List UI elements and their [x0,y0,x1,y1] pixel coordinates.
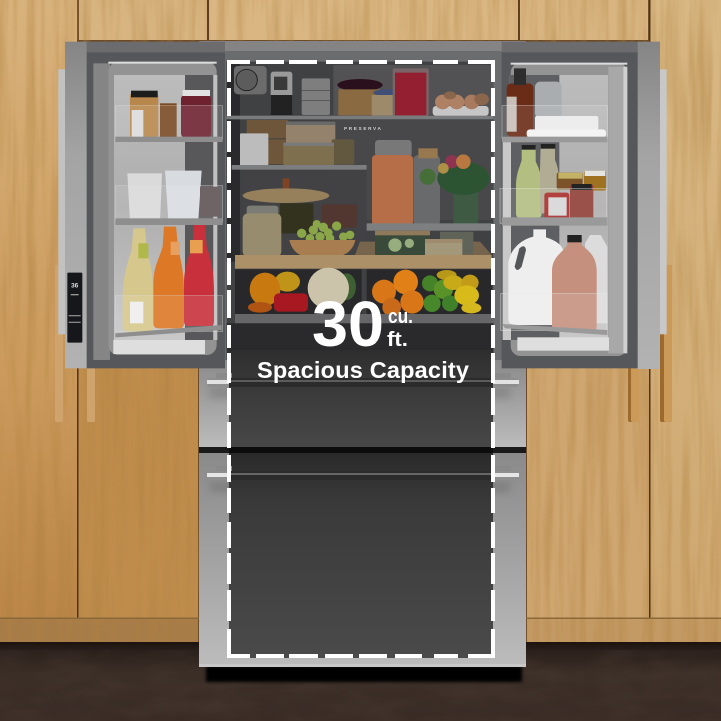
number 30: 30 [312,288,384,360]
subtitle: Spacious Capacity [257,357,469,383]
ice maker [234,66,267,94]
dressing and jars [516,144,606,221]
capacity callout [257,288,469,383]
left door [58,42,225,368]
top shelf items [271,68,489,116]
lower freezer drawers [199,350,526,667]
floor [0,642,721,721]
pitcher, carafe, flowers [372,140,489,226]
wood shelf [235,255,492,269]
milk jug and carafe [508,229,607,332]
right door [500,42,667,369]
door handle [660,69,667,334]
door bins [500,106,607,331]
top bin items [507,68,606,138]
dashed capacity outline [227,60,495,658]
wooden cabinet handles [55,265,672,422]
control panel [67,273,82,343]
refrigerator top and cavity [199,41,526,366]
door bins [115,106,223,332]
interior shelves and food [227,62,493,380]
jars [130,90,211,139]
unit cu. ft.: cu. [388,306,413,328]
crisper drawers with produce [235,268,492,317]
middle shelf items [240,120,383,166]
lower shelf items [243,178,473,257]
brand text: PRESERVA [344,126,383,131]
drawer handles [207,373,519,480]
door handle [58,69,65,334]
capacity callout: ft. [387,329,408,351]
yogurt tubs [127,171,220,222]
wood shelf back [355,242,492,255]
juice bottles [123,224,214,332]
control panel: 36 [71,282,79,289]
